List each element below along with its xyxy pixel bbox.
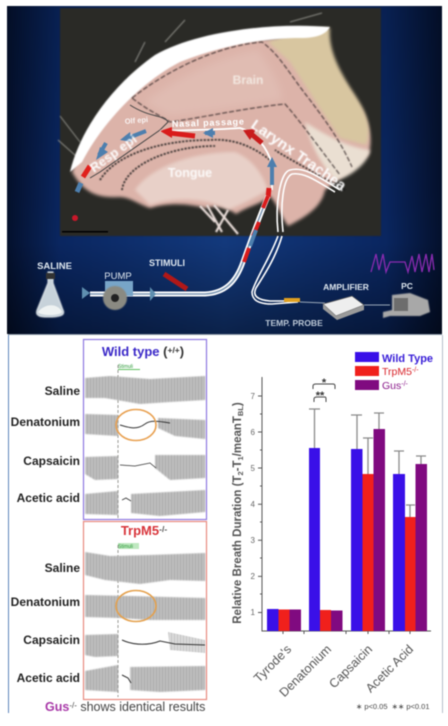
tube: trachea probe	[277, 169, 340, 232]
trace: saline	[85, 376, 205, 404]
arrow: inflow	[82, 287, 90, 299]
brain outline	[132, 42, 352, 175]
y axis ticks: 2	[251, 572, 256, 581]
label: Acetic acid (TrpM5): Acetic acid	[17, 671, 80, 685]
significance stars	[316, 377, 327, 402]
y axis ticks: 1	[251, 608, 256, 617]
significance brackets	[313, 384, 335, 402]
label: Larynx Trachea: Larynx Trachea	[248, 116, 350, 195]
nasal passage tube	[160, 128, 272, 190]
tissue: pale tongue and neck	[135, 152, 268, 210]
label: TEMP. PROBE: TEMP. PROBE	[265, 318, 323, 328]
y axis ticks: 6	[251, 428, 256, 437]
label: Resp epi: Resp epi	[87, 131, 140, 175]
label: Capsaicin (wild type): Capsaicin	[23, 454, 80, 468]
axes	[258, 377, 431, 634]
error bars	[309, 409, 426, 517]
y axis title: /meanT	[232, 416, 244, 456]
label: Nasal passage: Nasal passage	[172, 116, 244, 129]
label: PC: PC	[401, 281, 413, 291]
caption: Gus shows identical results: shows identical results	[77, 700, 205, 714]
bars: Acetic Acid	[393, 464, 427, 631]
heading: TrpM5: -/-	[159, 524, 167, 534]
tubing: main stimulus line	[90, 196, 268, 294]
x axis labels: Acetic Acid	[363, 642, 416, 695]
y axis title: -T	[232, 460, 244, 471]
legend: Gus	[355, 380, 409, 392]
significance legend: ∗ p<0.05 ∗∗ p<0.01	[356, 702, 429, 711]
trace: denatonium	[85, 595, 205, 620]
bars: Capsaicin	[351, 429, 385, 631]
y axis title: )	[232, 402, 244, 406]
panel: TrpM5 traces	[84, 522, 206, 700]
legend: wild type: Wild Type	[382, 353, 433, 365]
tubing: temperature probe	[252, 236, 298, 304]
x axis labels: Tyrode's	[251, 642, 294, 685]
tube: saline to pump	[64, 290, 86, 294]
panel: results frame	[8, 334, 443, 713]
y axis ticks: 4	[251, 500, 256, 509]
whiskers	[58, 13, 322, 156]
label: SALINE: SALINE	[37, 261, 72, 272]
computer: PC	[383, 293, 430, 318]
trace: saline	[85, 552, 205, 584]
y axis title: BL	[236, 406, 245, 416]
bar chart: relative breath duration	[232, 377, 431, 711]
photo: sagittal section of mouse head	[58, 8, 381, 236]
label: PUMP: PUMP	[104, 271, 132, 282]
flask: saline	[37, 272, 64, 317]
fur: neck whiskers	[200, 205, 238, 234]
arrow: pump outflow	[150, 287, 156, 301]
legend: TrpM5	[355, 366, 419, 378]
panel: wild type traces	[84, 340, 206, 520]
label: Capsaicin (TrpM5): Capsaicin	[23, 633, 80, 647]
legend: TrpM5: TrpM5	[382, 366, 412, 378]
y axis ticks: 3	[251, 536, 256, 545]
label: Saline (wild type): Saline	[45, 384, 80, 398]
y axis ticks	[251, 392, 256, 617]
label: Denatonium (wild type): Denatonium	[11, 415, 80, 429]
trace: capsaicin	[85, 632, 205, 657]
y axis title: Relative Breath Duration (T	[232, 476, 244, 624]
trace: denatonium	[85, 414, 205, 439]
label: stimuli: Stimuli	[118, 544, 133, 550]
callout: denatonium oval	[116, 590, 156, 622]
panel: experimental setup background	[7, 6, 442, 334]
fur: white top	[70, 26, 330, 172]
label: Brain: Brain	[233, 73, 263, 87]
significance stars: **	[316, 390, 325, 402]
tissue: head section	[72, 39, 370, 226]
y axis ticks: 7	[251, 392, 256, 401]
syringe: stimuli	[164, 274, 187, 289]
label: Olf epi: Olf epi	[124, 115, 148, 126]
probe: temperature sensor	[284, 298, 300, 302]
marker: stimulus line	[117, 545, 119, 697]
wire: probe to amplifier	[300, 302, 390, 305]
bars: Tyrode's	[267, 609, 301, 631]
heading: TrpM5: TrpM5	[121, 523, 159, 538]
significance stars: *	[322, 377, 327, 389]
dot: red marker	[72, 215, 78, 221]
label: Tongue: Tongue	[168, 166, 212, 180]
x axis labels	[251, 642, 416, 700]
scale bar	[62, 231, 108, 232]
legend: Gus: Gus	[382, 380, 401, 392]
tissue: tan back fur	[268, 28, 369, 145]
trace: acetic acid	[85, 665, 205, 692]
y axis title: 1	[236, 456, 245, 460]
label: stimuli	[118, 364, 140, 370]
amplifier	[323, 296, 364, 320]
x axis labels: Capsaicin	[326, 642, 375, 691]
legend	[355, 352, 433, 392]
y axis title: 2	[236, 471, 245, 476]
legend: TrpM5: -/-	[412, 367, 419, 374]
caption: Gus shows identical results: -/-	[69, 701, 77, 710]
trace: acetic acid	[85, 490, 205, 516]
tube coloured segments	[244, 196, 268, 262]
pump	[103, 281, 133, 310]
airway: dotted outline	[100, 140, 345, 190]
heading: Wild type: )	[180, 344, 184, 359]
callout: denatonium oval	[116, 410, 156, 440]
heading: Wild type: Wild type (	[102, 344, 167, 359]
legend: Gus: -/-	[401, 381, 409, 388]
diagram: perfusion and recording setup	[37, 196, 434, 328]
signal: purple breathing trace	[371, 254, 434, 272]
y axis ticks: 5	[251, 464, 256, 473]
arrows: airflow	[77, 127, 277, 198]
x axis labels: Denatonium	[277, 642, 334, 700]
heading: Wild type: +/+	[167, 345, 180, 355]
tissue: upper brain shading	[145, 50, 282, 116]
label: stimuli	[118, 543, 139, 550]
marker: stimulus line	[117, 365, 119, 518]
label: STIMULI: STIMULI	[149, 258, 185, 268]
label: AMPLIFIER: AMPLIFIER	[323, 282, 369, 292]
label: Acetic acid (wild type): Acetic acid	[17, 491, 80, 505]
label: Denatonium (TrpM5): Denatonium	[11, 595, 80, 609]
caption: Gus shows identical results: Gus	[45, 700, 69, 714]
label: stimuli: Stimuli	[118, 364, 133, 370]
trace: capsaicin	[85, 455, 205, 480]
bars: Denatonium	[309, 448, 342, 631]
label: Saline (TrpM5): Saline	[45, 561, 80, 575]
tissue: pale neck muscle	[305, 122, 370, 180]
